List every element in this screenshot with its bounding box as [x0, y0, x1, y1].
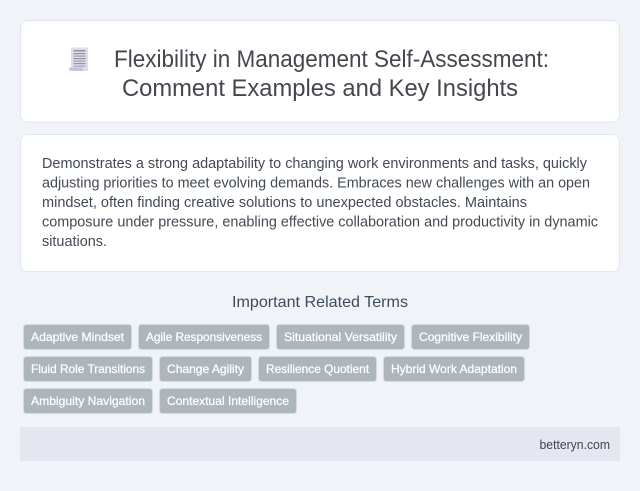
tag: Resilience Quotient: Resilience Quotient [266, 362, 370, 376]
tag: Hybrid Work Adaptation [384, 356, 524, 382]
footer bar [20, 427, 620, 461]
title: Flexibility in Management Self-Assessment: [114, 46, 549, 73]
tag: Agile Responsiveness [138, 324, 270, 350]
tag: Fluid Role Transitions: Fluid Role Transitions [31, 362, 145, 376]
panel: header card [20, 20, 620, 122]
footer text: betteryn.com: betteryn.com [540, 438, 610, 452]
tag: Contextual Intelligence [160, 388, 296, 414]
tag: Resilience Quotient [258, 356, 376, 382]
text block: description: situations. [42, 234, 107, 250]
heading: important related terms: Important Related Terms [232, 294, 408, 311]
icon: document scroll [69, 48, 88, 71]
text block: description: mindset, often finding creative solutions to unexpected obstacles. Maintains [42, 195, 527, 211]
tag: Contextual Intelligence: Contextual Intelligence [167, 394, 289, 408]
tag: Change Agility [160, 356, 252, 382]
title [114, 46, 549, 102]
tag: Change Agility: Change Agility [167, 362, 244, 376]
tag: Adaptive Mindset [24, 324, 132, 350]
title: Comment Examples and Key Insights [122, 75, 518, 102]
tag: Ambiguity Navigation: Ambiguity Navigation [31, 394, 145, 408]
text block: description: Demonstrates a strong adaptability to changing work environments and tasks, quickly [42, 156, 588, 172]
tag: Cognitive Flexibility [412, 324, 530, 350]
text block: description: adjusting priorities to meet evolving demands. Embraces new challenges with an open [42, 176, 590, 192]
tag: Agile Responsiveness: Agile Responsiveness [146, 330, 262, 344]
tag: Cognitive Flexibility: Cognitive Flexibility [419, 330, 522, 344]
panel: description card [20, 134, 620, 272]
tags: related terms [24, 324, 530, 414]
text block: description: composure under pressure, enabling effective collaboration and productivity in dynamic [42, 214, 598, 230]
tag: Situational Versatility [276, 324, 404, 350]
tag: Adaptive Mindset: Adaptive Mindset [31, 330, 125, 344]
tag: Ambiguity Navigation [24, 388, 152, 414]
tag: Fluid Role Transitions [24, 356, 152, 382]
tag: Hybrid Work Adaptation: Hybrid Work Adaptation [391, 362, 517, 376]
tag: Situational Versatility: Situational Versatility [284, 330, 397, 344]
text block: description [42, 156, 598, 250]
